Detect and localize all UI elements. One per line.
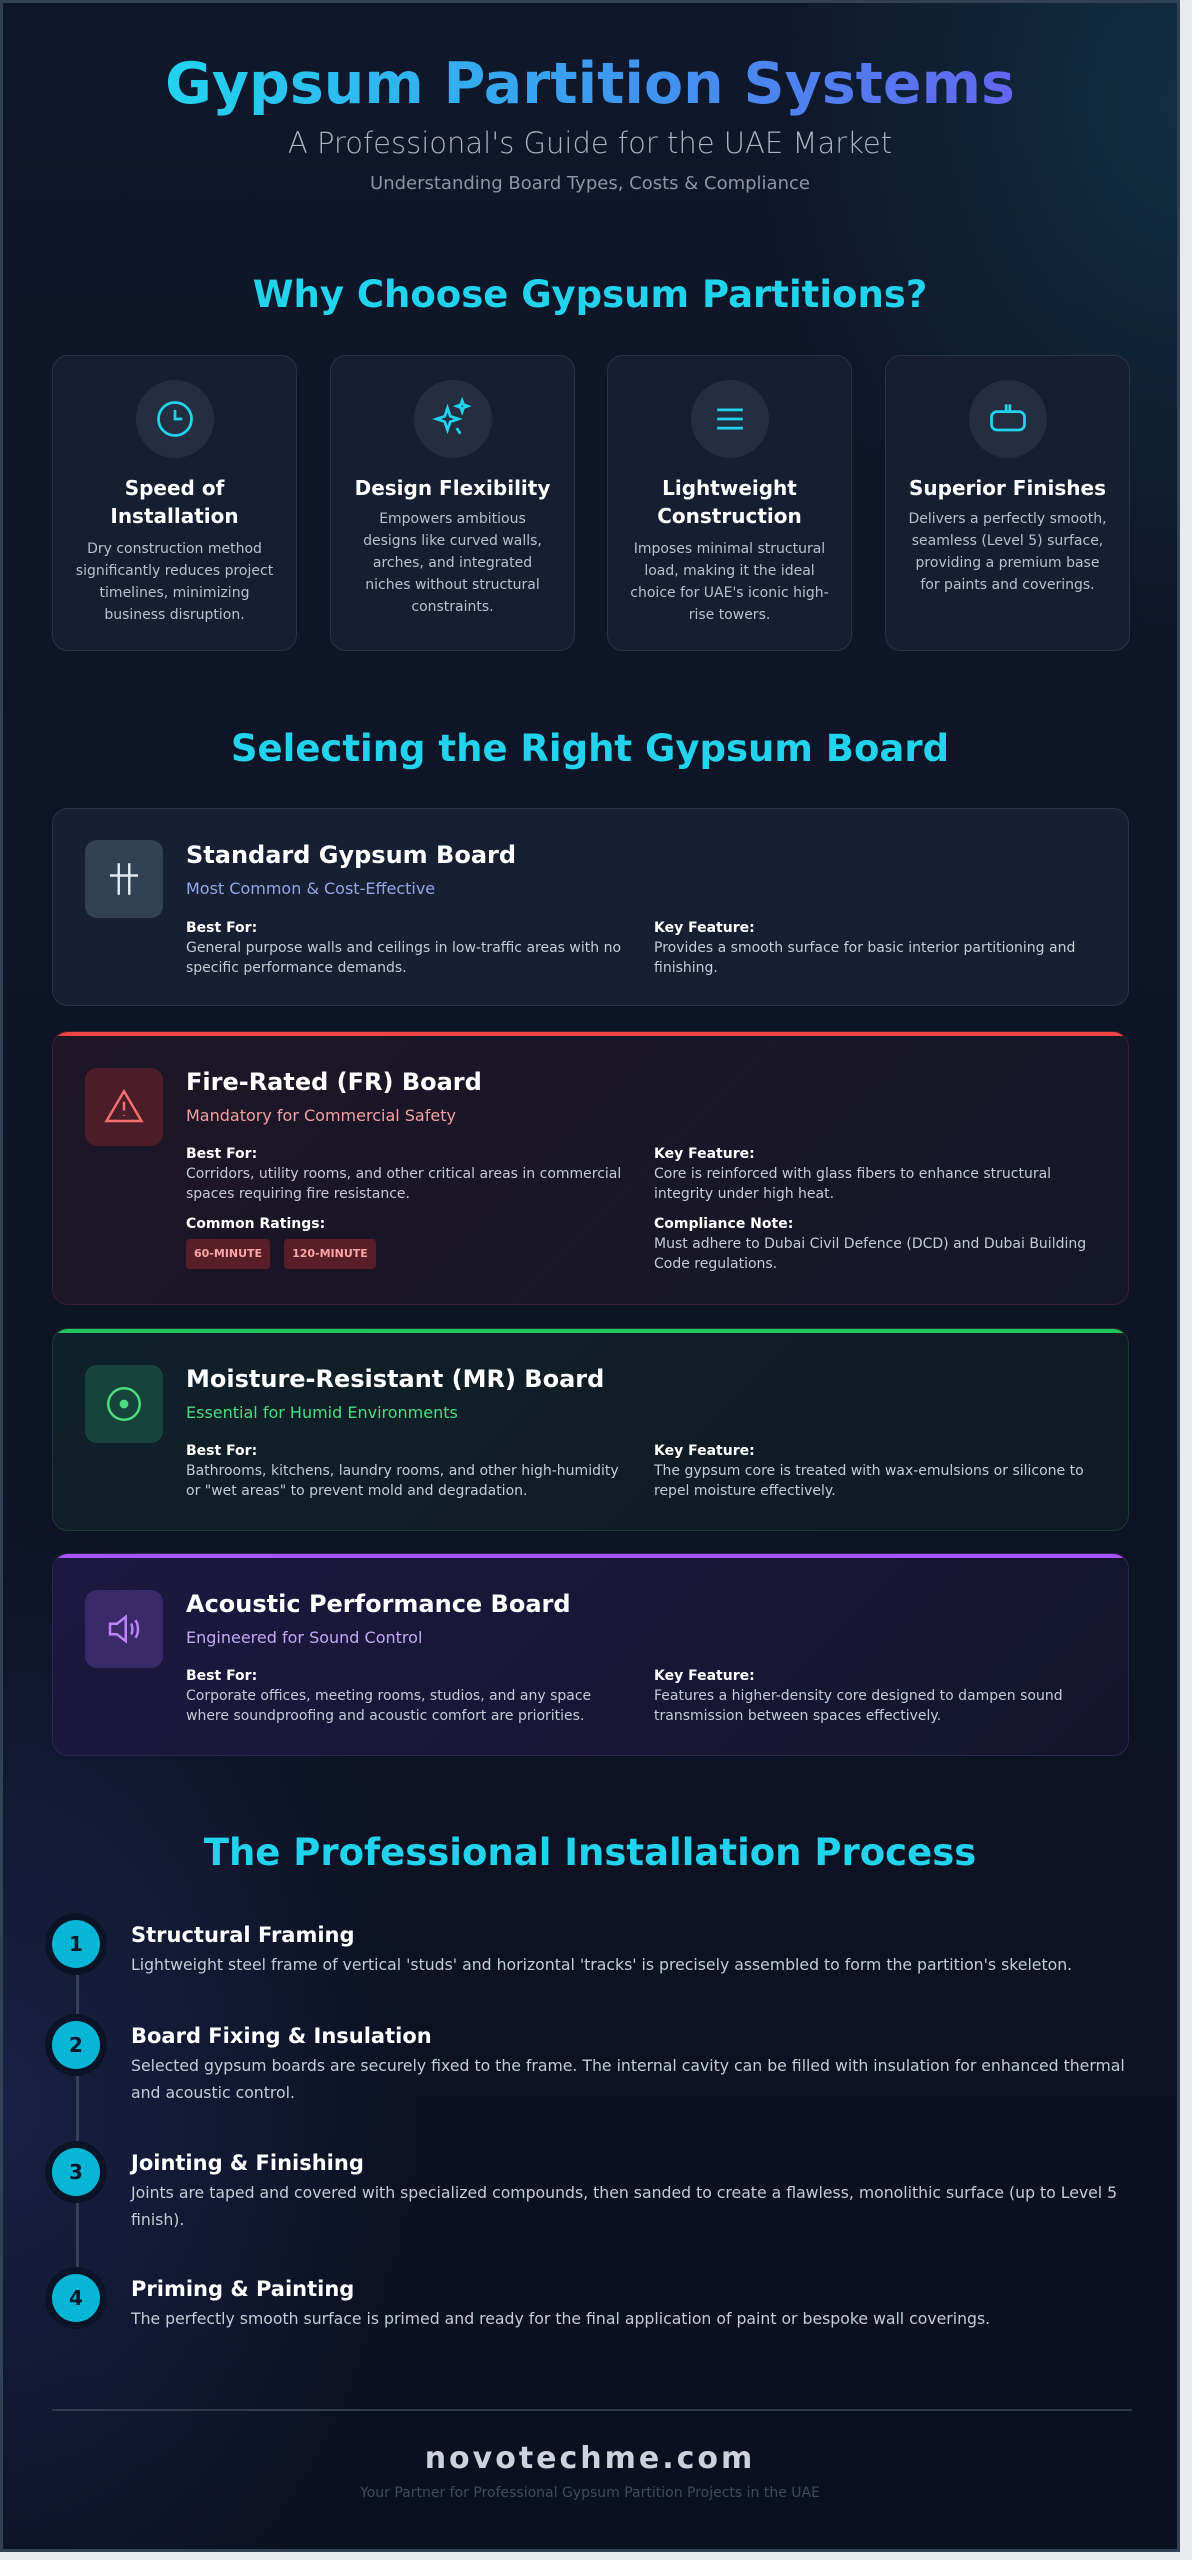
- text: key feature: [654, 920, 1075, 976]
- step 1: 1: [69, 1932, 83, 1956]
- panel: fire-rated: Mandatory for Commercial Safety: [186, 1106, 456, 1125]
- step 4: [45, 2267, 990, 2329]
- text: common ratings: Common Ratings:: [186, 1216, 325, 1232]
- step 1: Structural Framing: [131, 1923, 355, 1947]
- text: compliance: Compliance Note:: [654, 1216, 793, 1232]
- panel: standard board: Most Common & Cost-Effective: [186, 879, 435, 898]
- tagline: Understanding Board Types, Costs & Compliance: [370, 173, 810, 194]
- panel: design flexibility: [330, 355, 575, 651]
- connector line: [76, 1953, 79, 2298]
- panel: speed of installation: Dry construction method significantly reduces project timelines, minimizing business disruption.: [76, 541, 273, 623]
- text: key feature: Key Feature:: [654, 1443, 755, 1459]
- text: key feature: Features a higher-density core designed to dampen sound transmission between spaces effectively.: [654, 1688, 1063, 1724]
- panel: design flexibility: Empowers ambitious designs like curved walls, arches, and integrated niches without structural constraints.: [363, 511, 542, 615]
- text: best for: Best For:: [186, 920, 257, 936]
- text: best for: Best For:: [186, 1668, 257, 1684]
- subtitle: A Professional's Guide for the UAE Market: [288, 126, 892, 160]
- step 3: 3: [69, 2160, 83, 2184]
- step 2: 2: [69, 2033, 83, 2057]
- panel: acoustic: [52, 1553, 1129, 1756]
- step 1: [45, 1913, 1072, 1975]
- step 1: Lightweight steel frame of vertical 'studs' and horizontal 'tracks' is precisely assembled to form the partition's skeleton.: [131, 1955, 1072, 1974]
- text: compliance: Must adhere to Dubai Civil Defence (DCD) and Dubai Building Code regulations.: [654, 1236, 1086, 1272]
- text: best for: Bathrooms, kitchens, laundry rooms, and other high-humidity or "wet areas" to prevent mold and degradation.: [186, 1463, 619, 1499]
- panel: fire-rated: Fire-Rated (FR) Board: [186, 1068, 482, 1096]
- panel: standard board: [52, 808, 1129, 1006]
- panel: superior finishes: Superior Finishes: [909, 476, 1106, 500]
- panel: standard board: Standard Gypsum Board: [186, 841, 516, 869]
- text: best for: [186, 1443, 619, 1499]
- text: best for: [186, 1146, 621, 1202]
- panel: lightweight: [607, 355, 852, 651]
- icon: roller: [969, 380, 1047, 458]
- text: best for: Corporate offices, meeting rooms, studios, and any space where soundproofing and acoustic comfort are priorities.: [186, 1688, 591, 1724]
- panel: superior finishes: Delivers a perfectly smooth, seamless (Level 5) surface, providing a premium base for paints and coverings.: [908, 511, 1107, 593]
- icon: speaker: [85, 1590, 163, 1668]
- panel: fire-rated: [52, 1031, 1129, 1305]
- panel: moisture-resistant: [52, 1328, 1129, 1531]
- heading: selecting: Selecting the Right Gypsum Board: [231, 727, 949, 770]
- panel: speed of installation: Speed of: [125, 476, 224, 500]
- step 4: The perfectly smooth surface is primed and ready for the final application of paint or bespoke wall coverings.: [131, 2309, 990, 2328]
- panel: acoustic: Engineered for Sound Control: [186, 1628, 422, 1647]
- text: key feature: Key Feature:: [654, 1668, 755, 1684]
- footer tagline: Your Partner for Professional Gypsum Partition Projects in the UAE: [360, 2485, 820, 2501]
- step 4: Priming & Painting: [131, 2277, 354, 2301]
- panel: design flexibility: Design Flexibility: [355, 476, 550, 500]
- icon: drop target: [85, 1365, 163, 1443]
- step 3: [45, 2141, 1117, 2229]
- icon: lines: [691, 380, 769, 458]
- icon: clock: [136, 380, 214, 458]
- footer brand: novotechme.com: [425, 2441, 755, 2476]
- text: key feature: Core is reinforced with glass fibers to enhance structural integrity under high heat.: [654, 1166, 1051, 1202]
- text: key feature: Key Feature:: [654, 920, 755, 936]
- text: key feature: [654, 1146, 1051, 1202]
- text: best for: [186, 1668, 591, 1724]
- heading: why choose: Why Choose Gypsum Partitions?: [253, 273, 927, 316]
- panel: moisture-resistant: Moisture-Resistant (MR) Board: [186, 1365, 604, 1393]
- icon: standard: [85, 840, 163, 918]
- icon: sparkles: [414, 380, 492, 458]
- step 3: Joints are taped and covered with specialized compounds, then sanded to create a flawless, monolithic surface (up to Level 5 finish).: [131, 2183, 1117, 2229]
- text: best for: Corridors, utility rooms, and other critical areas in commercial spaces requiring fire resistance.: [186, 1166, 621, 1202]
- text: common ratings: 60-MINUTE: [194, 1247, 262, 1260]
- icon: warning: [85, 1068, 163, 1146]
- panel: lightweight: Lightweight: [662, 476, 797, 500]
- panel: speed of installation: [52, 355, 297, 651]
- step 2: [45, 2014, 1125, 2102]
- text: key feature: [654, 1668, 1063, 1724]
- text: best for: Best For:: [186, 1146, 257, 1162]
- step 2: Selected gypsum boards are securely fixed to the frame. The internal cavity can be filled with insulation for enhanced thermal and acoustic control.: [131, 2056, 1125, 2102]
- step 3: Jointing & Finishing: [131, 2151, 364, 2175]
- panel: superior finishes: [885, 355, 1130, 651]
- text: best for: Best For:: [186, 1443, 257, 1459]
- text: common ratings: 120-MINUTE: [292, 1247, 368, 1260]
- title: Gypsum Partition Systems: [165, 51, 1015, 117]
- panel: moisture-resistant: Essential for Humid Environments: [186, 1403, 458, 1422]
- heading: installation process: The Professional Installation Process: [204, 1831, 976, 1874]
- text: key feature: [654, 1443, 1084, 1499]
- text: key feature: The gypsum core is treated with wax-emulsions or silicone to repel moisture effectively.: [654, 1463, 1084, 1499]
- text: best for: General purpose walls and ceilings in low-traffic areas with no specific performance demands.: [186, 940, 621, 976]
- text: best for: [186, 920, 621, 976]
- text: key feature: Provides a smooth surface for basic interior partitioning and finishing.: [654, 940, 1075, 976]
- text: common ratings: [186, 1216, 376, 1269]
- text: compliance: [654, 1216, 1086, 1272]
- step 2: Board Fixing & Insulation: [131, 2024, 432, 2048]
- text: key feature: Key Feature:: [654, 1146, 755, 1162]
- panel: speed of installation: Installation: [110, 504, 239, 528]
- panel: acoustic: Acoustic Performance Board: [186, 1590, 571, 1618]
- panel: lightweight: Construction: [657, 504, 802, 528]
- step 4: 4: [69, 2286, 83, 2310]
- panel: lightweight: Imposes minimal structural load, making it the ideal choice for UAE's iconic high-rise towers.: [630, 541, 829, 623]
